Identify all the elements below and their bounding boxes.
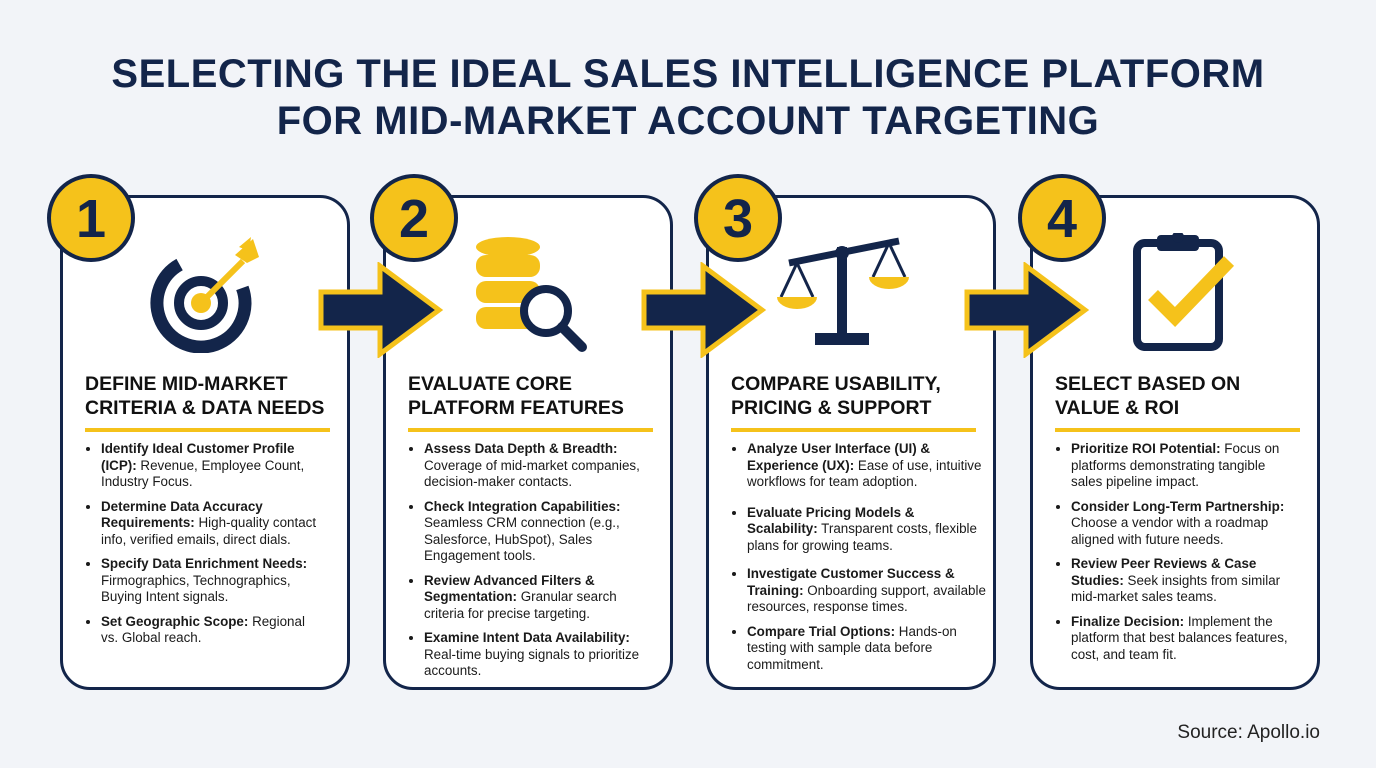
bullet list: Evaluate Pricing Models & Scalability: Transparent costs, flexible plans for growing teams. (747, 504, 977, 552)
panel: step 4 (1030, 195, 1320, 690)
bullet list: Assess Data Depth & Breadth: Coverage of mid-market companies, decision-maker contacts. (424, 441, 640, 489)
heading (731, 372, 976, 432)
bullet list (732, 441, 986, 672)
bullet list: Consider Long-Term Partnership: Choose a vendor with a roadmap aligned with future needs. (1071, 498, 1284, 546)
heading: SELECT BASED ON VALUE & ROI (1055, 373, 1240, 419)
bullet list: Determine Data Accuracy Requirements: High-quality contact info, verified emails, direct dials. (101, 498, 316, 546)
title: FOR MID-MARKET ACCOUNT TARGETING (277, 99, 1099, 143)
bullet list: Finalize Decision: Implement the platform that best balances features, cost, and team fit. (1071, 614, 1288, 662)
panel: step 2 (383, 195, 673, 690)
icon: scale (777, 238, 909, 345)
number badge 1: 1 (76, 189, 106, 249)
title: SELECTING THE IDEAL SALES INTELLIGENCE PLATFORM (111, 52, 1265, 96)
heading (408, 372, 653, 432)
title (111, 52, 1265, 143)
icon: target (150, 237, 259, 353)
heading (1055, 372, 1300, 432)
bullet list: Review Advanced Filters & Segmentation: Granular search criteria for precise targeting. (424, 572, 617, 620)
number badge 4 (1018, 174, 1106, 262)
arrow 1 (318, 262, 444, 358)
bullet list: Specify Data Enrichment Needs: Firmographics, Technographics, Buying Intent signals. (101, 556, 307, 604)
number badge 1 (47, 174, 135, 262)
bullet list: Investigate Customer Success & Training: Onboarding support, available resources, response times. (747, 566, 986, 614)
number badge 2: 2 (399, 189, 429, 249)
bullet list: Examine Intent Data Availability: Real-time buying signals to prioritize accounts. (424, 630, 639, 678)
bullet list: Review Peer Reviews & Case Studies: Seek insights from similar mid-market sales teams. (1071, 556, 1280, 604)
arrow 3 (964, 262, 1090, 358)
panel: step 3 (706, 195, 996, 690)
bullet list: Prioritize ROI Potential: Focus on platforms demonstrating tangible sales pipeline impact. (1071, 441, 1279, 489)
icon: clipboard check (1133, 233, 1234, 351)
bullet list: Compare Trial Options: Hands-on testing with sample data before commitment. (747, 624, 957, 672)
bullet list (409, 441, 640, 678)
number badge 4: 4 (1047, 189, 1077, 249)
arrow 2 (642, 262, 766, 358)
bullet list: Identify Ideal Customer Profile (ICP): Revenue, Employee Count, Industry Focus. (101, 441, 304, 489)
number badge 3: 3 (723, 189, 753, 249)
source note: Source: Apollo.io (1177, 722, 1320, 743)
number badge 3 (694, 174, 782, 262)
panel: step 1 (60, 195, 350, 690)
bullet list (86, 441, 316, 645)
heading: EVALUATE CORE PLATFORM FEATURES (408, 373, 624, 419)
bullet list: Check Integration Capabilities: Seamless CRM connection (e.g., Salesforce, HubSpot), Sales Engagement tools. (424, 498, 620, 563)
bullet list (1056, 441, 1288, 662)
heading: DEFINE MID-MARKET CRITERIA & DATA NEEDS (85, 373, 324, 419)
number badge 2 (370, 174, 458, 262)
bullet list: Analyze User Interface (UI) & Experience (UX): Ease of use, intuitive workflows for team adoption. (747, 441, 981, 489)
icon: database search (476, 237, 587, 352)
bullet list: Set Geographic Scope: Regional vs. Global reach. (101, 614, 305, 645)
heading: COMPARE USABILITY, PRICING & SUPPORT (731, 373, 941, 419)
